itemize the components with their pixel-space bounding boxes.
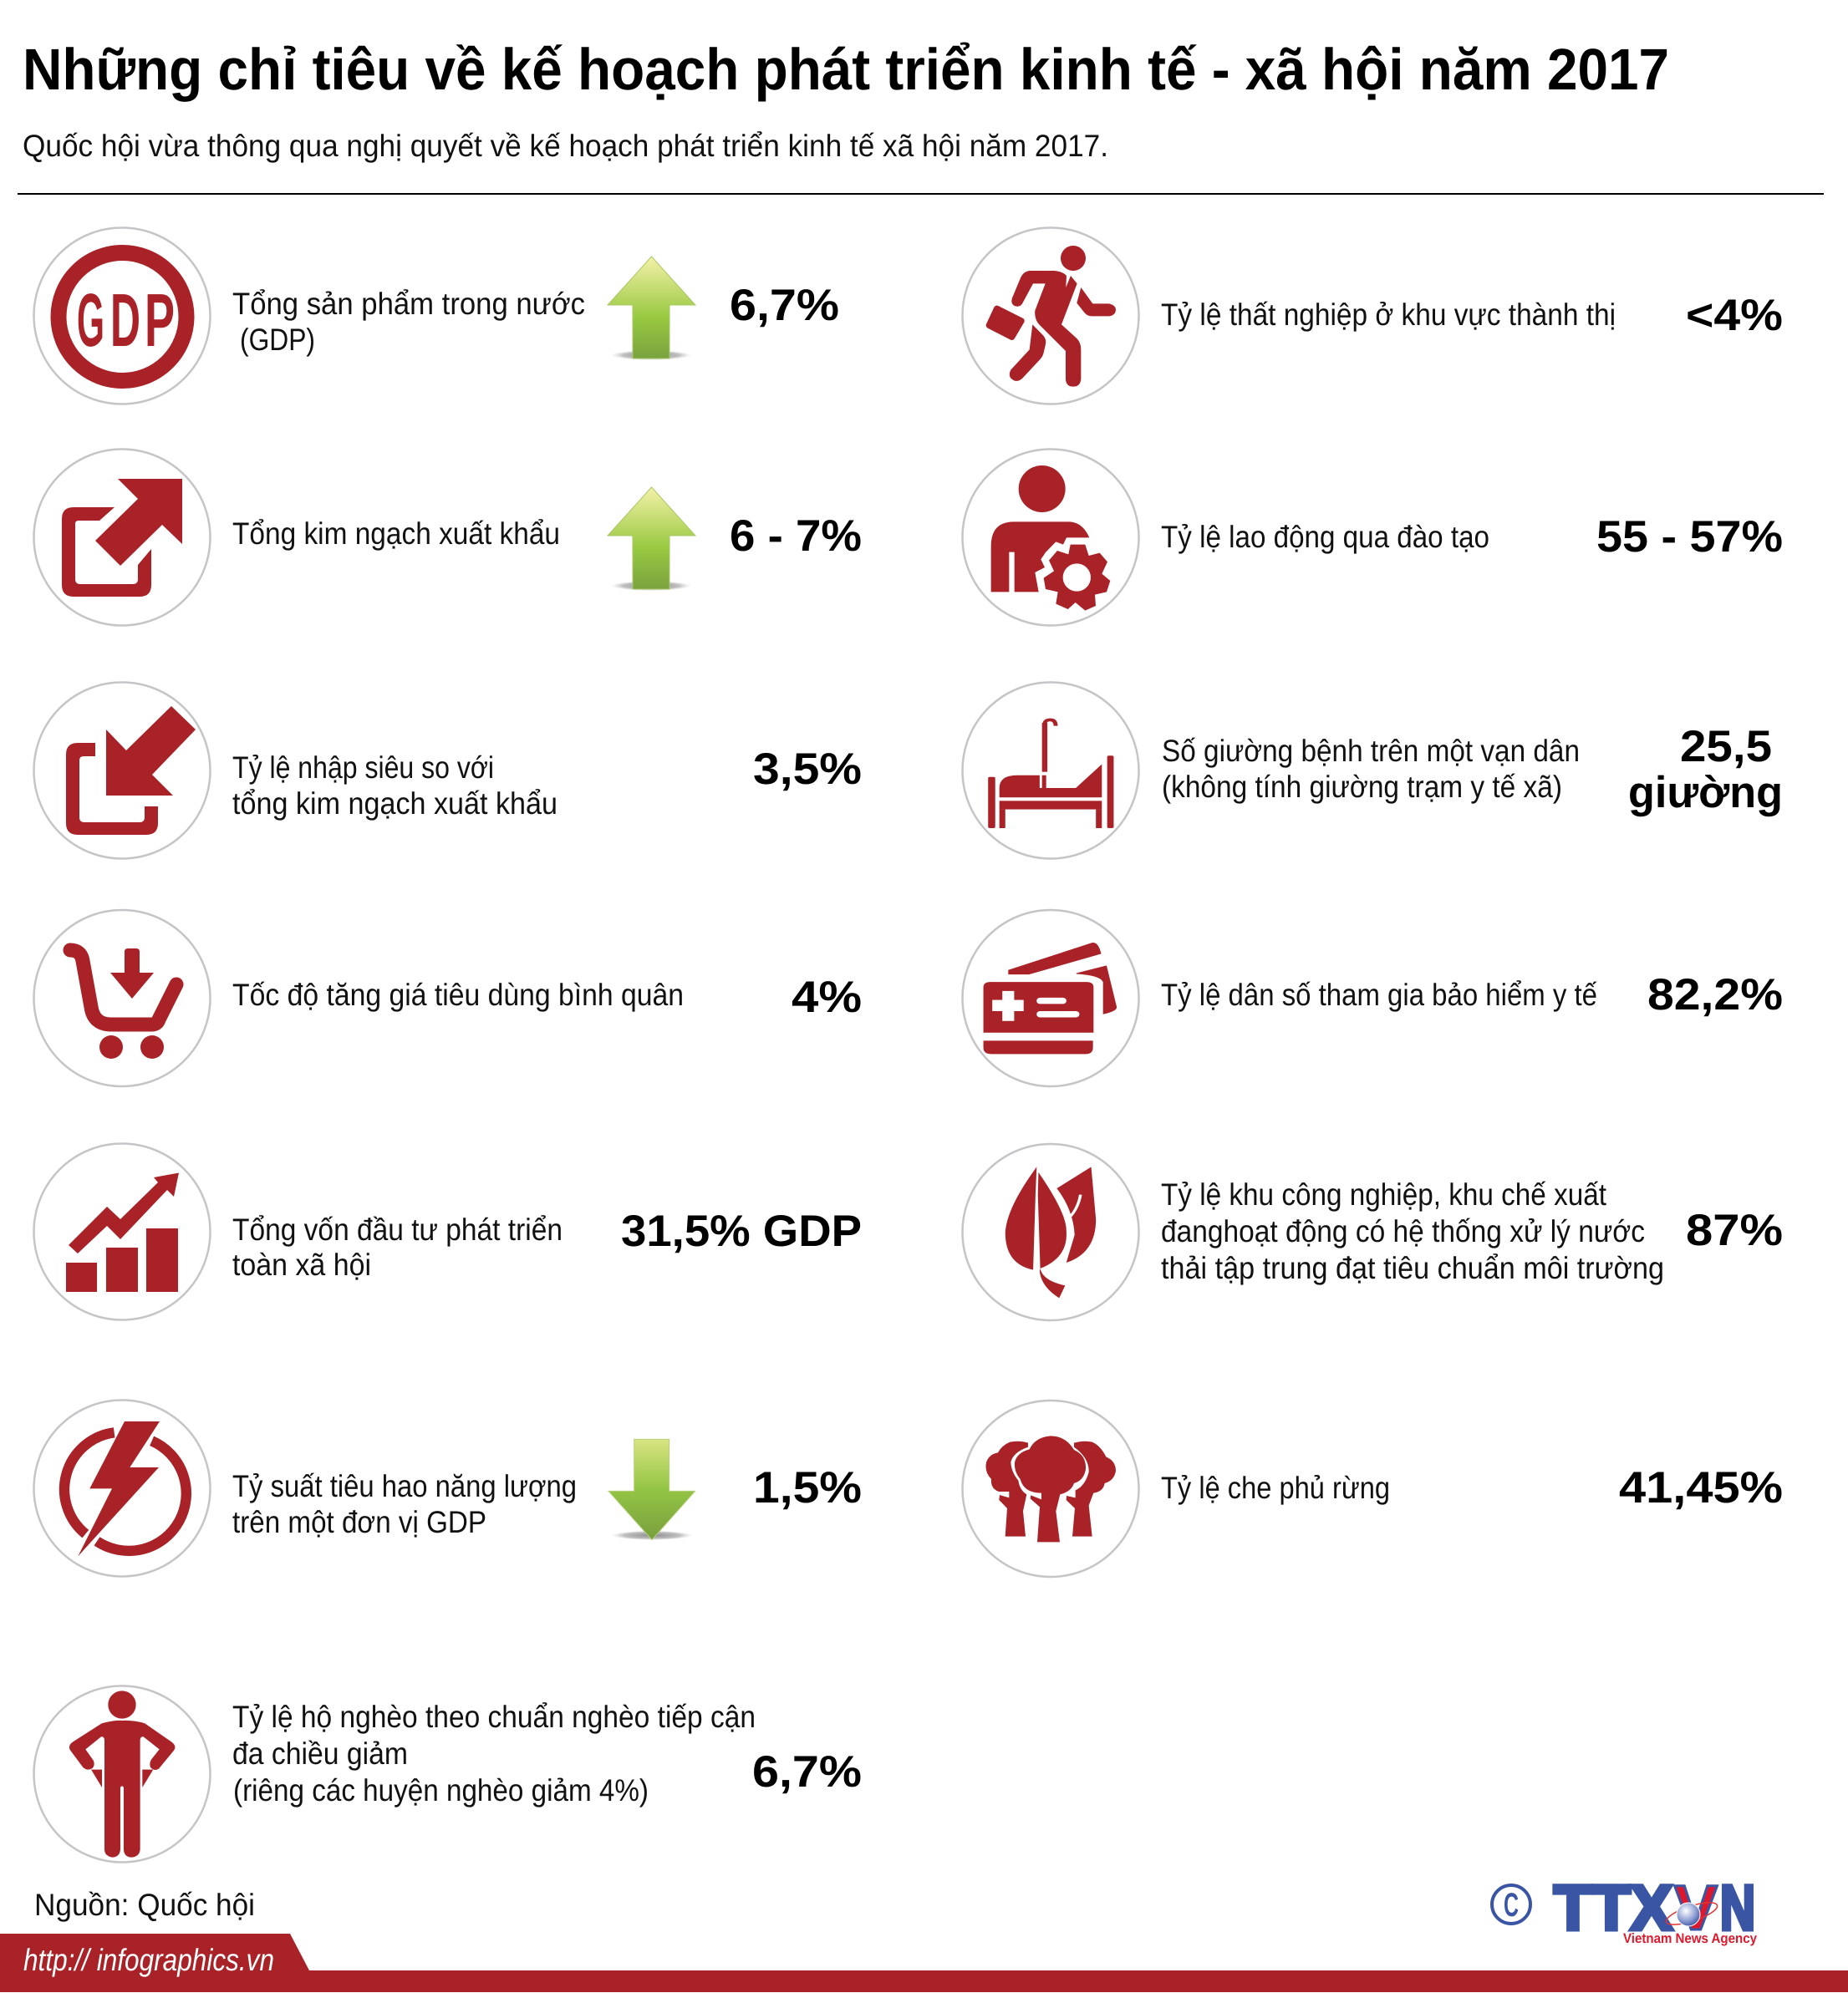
label: energy: trên một đơn vị GDP	[232, 1505, 486, 1539]
panel: forest cover	[963, 1401, 1783, 1577]
label: hospital beds: Số giường bệnh trên một vạn dân	[1162, 734, 1580, 768]
value: industrial zones: 87%	[1686, 1206, 1783, 1255]
panel: GDP	[33, 227, 839, 404]
logo: TTXVN copyright: N	[1720, 1873, 1755, 1944]
subtitle: Quốc hội vừa thông qua nghị quyết về kế hoạch phát triển kinh tế xã hội năm 2017.	[23, 129, 1108, 163]
icon: running man with briefcase	[989, 246, 1116, 387]
panel: health insurance	[963, 910, 1783, 1086]
label: forest cover: Tỷ lệ che phủ rừng	[1161, 1471, 1390, 1505]
value: GDP: 6,7%	[730, 281, 839, 330]
icon: rising chart	[33, 1143, 211, 1320]
icon: hospital bed	[988, 719, 1113, 828]
label: industrial zones: đanghoạt động có hệ thống xử lý nước	[1161, 1214, 1645, 1248]
label: energy: Tỷ suất tiêu hao năng lượng	[232, 1469, 577, 1503]
logo: TTXVN copyright: V	[1674, 1873, 1718, 1944]
panel: energy	[33, 1401, 862, 1576]
value: export: 6 - 7%	[730, 511, 862, 561]
footer link: http:// infographics.vn	[23, 1943, 274, 1977]
label: trained labour: Tỷ lệ lao động qua đào tạo	[1161, 520, 1489, 554]
label: investment: Tổng vốn đầu tư phát triển	[232, 1213, 563, 1247]
value: hospital beds: giường	[1628, 768, 1783, 817]
icon: export arrow	[33, 450, 211, 625]
value: hospital beds	[1628, 722, 1783, 817]
label: investment: toàn xã hội	[232, 1248, 371, 1282]
label: GDP: (GDP)	[240, 323, 315, 357]
panel: export	[33, 450, 862, 625]
value: forest cover: 41,45%	[1619, 1463, 1783, 1513]
icon: green up arrow	[608, 257, 695, 360]
label: industrial zones	[1161, 1177, 1664, 1285]
label: poverty: đa chiều giảm	[232, 1736, 408, 1771]
label: trade deficit: Tỷ lệ nhập siêu so với	[232, 750, 494, 785]
value: consumer prices: 4%	[792, 973, 862, 1022]
icon: GDP ring: D	[110, 279, 140, 363]
label: poverty	[232, 1700, 756, 1807]
label: industrial zones: thải tập trung đạt tiêu chuẩn môi trường	[1161, 1251, 1664, 1285]
icon: person with gear	[991, 465, 1110, 611]
value: poverty: 6,7%	[752, 1747, 862, 1797]
label: poverty: (riêng các huyện nghèo giảm 4%)	[233, 1773, 649, 1807]
label: trade deficit	[232, 750, 557, 821]
icon: insurance cards	[984, 943, 1117, 1054]
label: GDP: Tổng sản phẩm trong nước	[232, 287, 585, 321]
label: industrial zones: Tỷ lệ khu công nghiệp, khu chế xuất	[1161, 1177, 1607, 1212]
panel: hospital beds	[963, 682, 1783, 859]
label: unemployment: Tỷ lệ thất nghiệp ở khu vực thành thị	[1161, 297, 1616, 332]
panel: industrial zones	[963, 1144, 1783, 1320]
panel: poverty	[33, 1686, 862, 1862]
value: investment: 31,5% GDP	[621, 1207, 862, 1256]
logo: TTXVN copyright	[1492, 1873, 1758, 1946]
icon: leaves	[1005, 1167, 1096, 1298]
icon: lightning bolt	[64, 1421, 186, 1556]
label: investment	[232, 1213, 563, 1282]
label: hospital beds	[1162, 734, 1580, 804]
panel: investment	[33, 1143, 862, 1320]
icon: trees	[985, 1436, 1116, 1542]
icon: GDP ring: P	[145, 279, 175, 363]
value: hospital beds: 25,5	[1680, 722, 1772, 771]
icon: man with empty pockets	[69, 1690, 175, 1858]
value: health insurance: 82,2%	[1647, 970, 1783, 1019]
logo: TTXVN copyright: C	[1504, 1887, 1519, 1924]
label: health insurance: Tỷ lệ dân số tham gia bảo hiểm y tế	[1161, 978, 1597, 1012]
panel: consumer prices	[33, 910, 862, 1086]
panel: trade deficit	[33, 682, 862, 859]
label: GDP	[232, 287, 585, 357]
label: energy	[232, 1469, 577, 1539]
label: consumer prices: Tốc độ tăng giá tiêu dùng bình quân	[232, 978, 684, 1012]
label: poverty: Tỷ lệ hộ nghèo theo chuẩn nghèo tiếp cận	[232, 1700, 756, 1734]
panel: trained labour	[963, 450, 1783, 625]
label: hospital beds: (không tính giường trạm y tế xã)	[1162, 770, 1562, 804]
icon: green up arrow	[608, 487, 695, 591]
footer band	[0, 1934, 1848, 1992]
title: Những chỉ tiêu về kế hoạch phát triển kinh tế - xã hội năm 2017	[23, 37, 1669, 102]
label: trade deficit: tổng kim ngạch xuất khẩu	[232, 786, 557, 821]
logo: TTXVN copyright: TTX	[1554, 1873, 1672, 1944]
logo: TTXVN copyright: Vietnam News Agency	[1623, 1931, 1758, 1946]
icon: GDP ring: G	[77, 279, 104, 363]
value: unemployment: <4%	[1686, 291, 1783, 340]
icon: shopping cart	[33, 910, 211, 1086]
value: energy: 1,5%	[753, 1463, 862, 1513]
icon: import arrow	[33, 682, 211, 859]
panel: unemployment	[963, 227, 1783, 404]
source note: Nguồn: Quốc hội	[34, 1888, 255, 1922]
icon: GDP ring	[33, 227, 211, 404]
value: trade deficit: 3,5%	[753, 745, 862, 794]
label: export: Tổng kim ngạch xuất khẩu	[232, 516, 560, 551]
icon: green down arrow	[608, 1439, 695, 1540]
value: trained labour: 55 - 57%	[1596, 512, 1783, 562]
